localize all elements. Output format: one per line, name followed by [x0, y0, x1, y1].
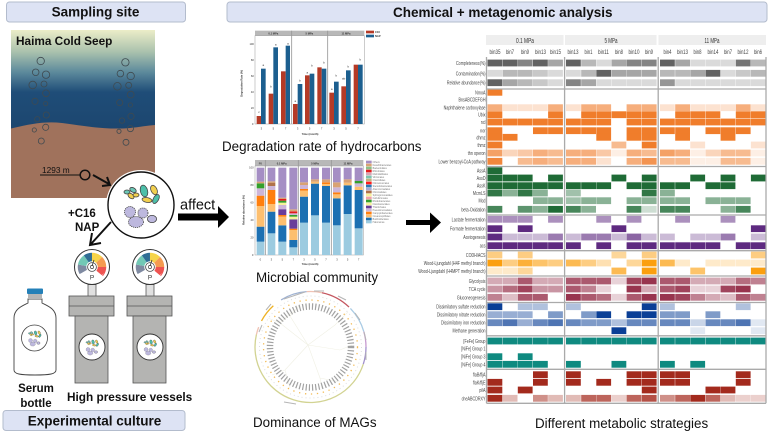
bar chart: degradation rate: b [270, 85, 272, 89]
heatmap bin labels: bin35 [490, 49, 501, 56]
heatmap row labels: Dissimilatory sulfate reduction [436, 304, 486, 311]
heatmap row labels: Gluconeogenesis [457, 295, 486, 302]
bar chart: degradation rate: b [323, 60, 325, 64]
heatmap bin labels: bin12 [738, 49, 749, 56]
heatmap hydrogenase rows [488, 338, 766, 368]
stacked bar chart: microbial community: 0 [260, 257, 262, 261]
title: degradation rate of hydrocarbons: Degradation rate of hydrocarbons [222, 139, 422, 154]
bar chart: degradation rate: b [299, 78, 301, 82]
heatmap row labels: Wood-Ljungdahl (H4MPT methyl branch) [418, 268, 486, 275]
stacked bar chart: microbial community: 11 MPa [343, 161, 353, 165]
heatmap row labels: Methane generation [452, 328, 486, 335]
legend: microbial taxa: Nitrosococcales [373, 182, 390, 185]
legend: microbial taxa: Cellvibrionales [373, 197, 389, 200]
stacked bar chart: microbial community: Time (month) [302, 262, 318, 266]
legend: microbial taxa: Clostridiales [373, 179, 386, 182]
bar chart: degradation rate: 7 [285, 126, 287, 130]
heatmap row labels: Lower benzoyl-CoA pathway [438, 159, 486, 166]
stacked bar chart: microbial community: 100 [249, 166, 254, 170]
heatmap row labels: AssD [477, 175, 486, 182]
bar chart: degradation rate: 40 [251, 90, 254, 94]
heatmap central carbon rows [488, 278, 766, 301]
heatmap bin labels: bin1 [584, 49, 593, 56]
heatmap row labels [418, 60, 486, 403]
heatmap row labels: Dissimilatory nitrate reduction [437, 312, 486, 319]
heatmap row labels: [NiFe] Group 4 [461, 362, 486, 369]
heatmap bin labels: bin14 [708, 49, 719, 56]
heatmap: metabolic strategies [418, 35, 766, 403]
header: sampling site [6, 2, 186, 22]
bar chart: degradation rate: b [311, 64, 313, 68]
stacked bar chart: microbial community: 7 [293, 257, 295, 261]
heatmap row labels: Dissimilatory iron reduction [441, 320, 486, 327]
stacked bar chart: microbial community: 40 [251, 218, 254, 222]
heatmap row labels: Glycolysis [469, 278, 486, 285]
header: chemical and metagenomic analysis: Chemical + metagenomic analysis [393, 5, 612, 20]
heatmap pressure headers: 0.1 MPa [516, 38, 534, 45]
bar chart: degradation rate: 100 [249, 42, 254, 46]
heatmap row labels: thn operon [468, 150, 486, 157]
stacked bar chart: microbial community: 60 [251, 200, 254, 204]
heatmap row labels: acs [480, 244, 486, 250]
heatmap row labels: Ubix [478, 112, 486, 119]
heatmap energy metabolism rows [488, 303, 766, 334]
bar chart: degradation rate: 3 [333, 126, 335, 130]
bar chart: degradation rate: C16 [375, 30, 380, 34]
arrow: to heatmap [406, 212, 441, 233]
legend: microbial taxa: Alteromonadales [373, 188, 391, 191]
heatmap frame lines [486, 57, 766, 403]
bar chart: degradation rate: 60 [251, 74, 254, 78]
heatmap bin labels: bin13 [535, 49, 546, 56]
heatmap row labels: McmLS [473, 190, 486, 197]
bar chart: degradation rate: b [347, 64, 349, 68]
heatmap row labels: ncl [481, 119, 486, 126]
label: affect: affect [180, 198, 215, 214]
legend: microbial taxa: Thiotrichales [373, 206, 387, 209]
heatmap row labels: Mcd [478, 198, 486, 205]
heatmap bin labels: bin6 [754, 49, 762, 56]
icon: pressure vessel 1 [69, 250, 114, 383]
header: experimental culture [3, 410, 185, 430]
stacked bar chart: microbial community: 3 [271, 257, 273, 261]
heatmap fermentation rows [488, 216, 766, 249]
label: serum bottle: Serum [18, 383, 54, 395]
heatmap row labels: TCA cycle [469, 286, 486, 293]
bar chart: degradation rate: 20 [251, 106, 254, 110]
stacked bar chart: microbial community [242, 160, 393, 266]
stacked bar chart: microbial community: F0 [259, 161, 262, 165]
heatmap row labels: Wood-Ljungdahl (H4F methyl branch) [424, 260, 486, 267]
heatmap pressure headers [486, 35, 766, 45]
bar chart: degradation rate: a [306, 71, 308, 75]
heatmap fatty acid rows [488, 167, 766, 213]
heatmap pressure headers: 5 MPa [604, 38, 618, 45]
stacked bar chart: microbial community: 7 [358, 257, 360, 261]
legend: microbial taxa: Steroidobacterales [373, 185, 393, 188]
stacked bar chart: microbial community: 5 [347, 257, 349, 261]
heatmap row labels: nor [480, 128, 486, 135]
bar chart: degradation rate: Time (month) [302, 132, 318, 136]
label: +C16 NAP: NAP [75, 222, 100, 234]
heatmap bin labels: bin10 [628, 49, 640, 56]
panel: Haima Cold Seep illustration: Haima Cold Seep [16, 34, 112, 48]
legend: microbial taxa: Campylobacterales [373, 212, 393, 215]
label: serum bottle: bottle [20, 398, 52, 410]
heatmap bin labels: bin13 [568, 49, 579, 56]
heatmap row labels: Lactate fermentation [452, 217, 486, 224]
bar chart: degradation rate: 7 [357, 126, 359, 130]
bar chart: degradation rate: b [359, 57, 361, 61]
stacked bar chart: microbial community: 80 [251, 183, 254, 187]
bar chart: degradation rate [240, 30, 381, 136]
heatmap row labels: thmz [477, 142, 486, 149]
legend: microbial taxa: Vibrionales [373, 176, 385, 179]
bar chart: degradation rate: a [287, 41, 289, 45]
heatmap bin labels: bin9 [645, 49, 653, 56]
stacked bar chart: microbial community: 3 [303, 257, 305, 261]
bar chart: degradation rate: 3 [261, 126, 263, 130]
bar chart: degradation rate: a [275, 43, 277, 47]
panel: Haima Cold Seep illustration: 1293 m [42, 165, 70, 175]
bar chart: degradation rate: 0.1 MPa [268, 31, 279, 35]
label: high pressure vessels: High pressure vessels [67, 390, 193, 404]
bar chart: degradation rate: a [294, 99, 296, 103]
icon: microbes circle [106, 170, 176, 240]
heatmap row labels: BnsABCDEFGH [458, 97, 486, 104]
heatmap row labels: [NiFe] Group 3 [461, 354, 486, 361]
stacked bar chart: microbial community: 3 [336, 257, 338, 261]
bar chart: degradation rate: 5 [273, 126, 275, 130]
bar chart: degradation rate: b [335, 74, 337, 78]
arrow: sediment to enrichment [93, 175, 110, 186]
legend: microbial taxa: Flavobacteriales [373, 203, 390, 206]
icon: pressure vessel 2 [127, 250, 172, 383]
bar chart: degradation rate: Degradation Rate (%) [240, 70, 244, 97]
arrow: to pressure vessels [90, 222, 111, 245]
legend: microbial taxa: Bacteroidales [373, 167, 388, 170]
legend: microbial taxa: Halomonas [373, 222, 385, 224]
bar chart: degradation rate: 3 [297, 126, 299, 130]
bar chart: degradation rate: c [258, 110, 260, 114]
bar chart: degradation rate: a [262, 63, 264, 67]
stacked bar chart: microbial community: Relative abundance (%) [242, 195, 246, 225]
legend: microbial taxa: Oceanospirillales [373, 215, 391, 218]
heatmap row labels: pilA [479, 387, 486, 394]
legend: microbial taxa: Marinilabiliales [373, 173, 389, 176]
heatmap row labels: cheABCDRXY [462, 396, 486, 403]
bar chart: degradation rate: 5 MPa [305, 31, 314, 35]
heatmap bin labels: bin15 [550, 49, 561, 56]
heatmap bin labels: bin7 [724, 49, 732, 56]
title: dominance of MAGs: Dominance of MAGs [253, 415, 377, 430]
title: microbial community: Microbial community [256, 270, 378, 285]
heatmap bin labels: bin8 [615, 49, 623, 56]
bar chart: degradation rate: 11 MPa [341, 31, 351, 35]
heatmap row labels: Naphthalene carboxylase [444, 105, 486, 112]
heatmap bin labels: bin13 [677, 49, 688, 56]
legend: microbial taxa [366, 161, 393, 224]
heatmap bin labels [490, 49, 762, 56]
heatmap carbon fixation rows [488, 252, 766, 274]
stacked bar chart: microbial community: 5 [282, 257, 284, 261]
heatmap row labels: flaK/fljE [473, 380, 486, 387]
heatmap row labels: Formate fermentation [450, 226, 486, 233]
header: chemical and metagenomic analysis [227, 2, 767, 22]
arrow: affect [178, 206, 229, 228]
header: experimental culture: Experimental culture [28, 414, 162, 428]
bar chart: degradation rate: NAP [375, 34, 381, 38]
heatmap row labels: Acetogenesis [463, 234, 486, 241]
bar chart: degradation rate: ab [342, 76, 346, 80]
legend: microbial taxa: Sphingomonadales [373, 195, 393, 197]
heatmap row labels: Relative abundance(%) [447, 80, 486, 87]
bar chart: degradation rate: a [331, 87, 333, 91]
heatmap row labels: dhmz [476, 135, 486, 142]
heatmap bin labels: bin7 [506, 49, 514, 56]
legend: microbial taxa: Others [373, 161, 380, 164]
icon: serum bottle [14, 288, 56, 375]
heatmap row labels: beta-Oxidation [461, 207, 486, 214]
legend: microbial taxa: Chromatiales [373, 191, 387, 194]
heatmap row labels: CODH/ACS [466, 252, 486, 259]
heatmap row labels: NmoA [475, 90, 486, 97]
heatmap bin labels: bin11 [598, 49, 609, 56]
title: different metabolic strategies: Different metabolic strategies [535, 416, 708, 431]
heatmap bin labels: bin4 [664, 49, 672, 56]
heatmap genome quality rows [488, 60, 766, 86]
heatmap row labels: [NiFe] Group 1 [461, 346, 486, 353]
stacked bar chart: microbial community: 0 [252, 253, 254, 257]
bar chart: degradation rate: 0 [252, 122, 254, 126]
heatmap hydrocarbon degradation rows [488, 89, 766, 165]
stacked bar chart: microbial community: 0.1 MPa [277, 161, 287, 165]
heatmap motility rows [488, 371, 766, 402]
stacked bar chart: microbial community: 20 [251, 235, 254, 239]
bar chart: degradation rate: 5 [345, 126, 347, 130]
heatmap row labels: AssK [477, 183, 486, 190]
heatmap row labels: AssA [477, 168, 486, 175]
legend: microbial taxa: Burkholderiales [373, 218, 390, 221]
heatmap row labels: flaB/fljA [473, 372, 486, 379]
stacked bar chart: microbial community: 5 [314, 257, 316, 261]
legend: microbial taxa: Pseudomonadales [373, 210, 393, 212]
label: +C16 NAP: +C16 [68, 208, 96, 220]
heatmap bin labels: bin8 [694, 49, 702, 56]
legend: microbial taxa: Desulfobacterales [373, 164, 392, 167]
bar chart: degradation rate: 5 [309, 126, 311, 130]
panel: Haima Cold Seep illustration [11, 30, 155, 198]
heatmap row labels: Completeness(%) [456, 60, 486, 67]
stacked bar chart: microbial community: 5 MPa [311, 161, 319, 165]
bar chart: degradation rate: 80 [251, 58, 254, 62]
heatmap row labels: [FeFe] Group [463, 338, 486, 345]
heatmap row labels: Contamination(%) [456, 71, 486, 78]
stacked bar chart: microbial community: 7 [325, 257, 327, 261]
circular tree: dominance of MAGs [232, 269, 389, 425]
heatmap bin labels: bin9 [521, 49, 529, 56]
heatmap pressure headers: 11 MPa [704, 38, 720, 45]
header: sampling site: Sampling site [52, 4, 140, 20]
bar chart: degradation rate: 7 [321, 126, 323, 130]
legend: microbial taxa: Rhizobiales [373, 171, 386, 173]
legend: microbial taxa: Rhodobacterales [373, 200, 391, 203]
